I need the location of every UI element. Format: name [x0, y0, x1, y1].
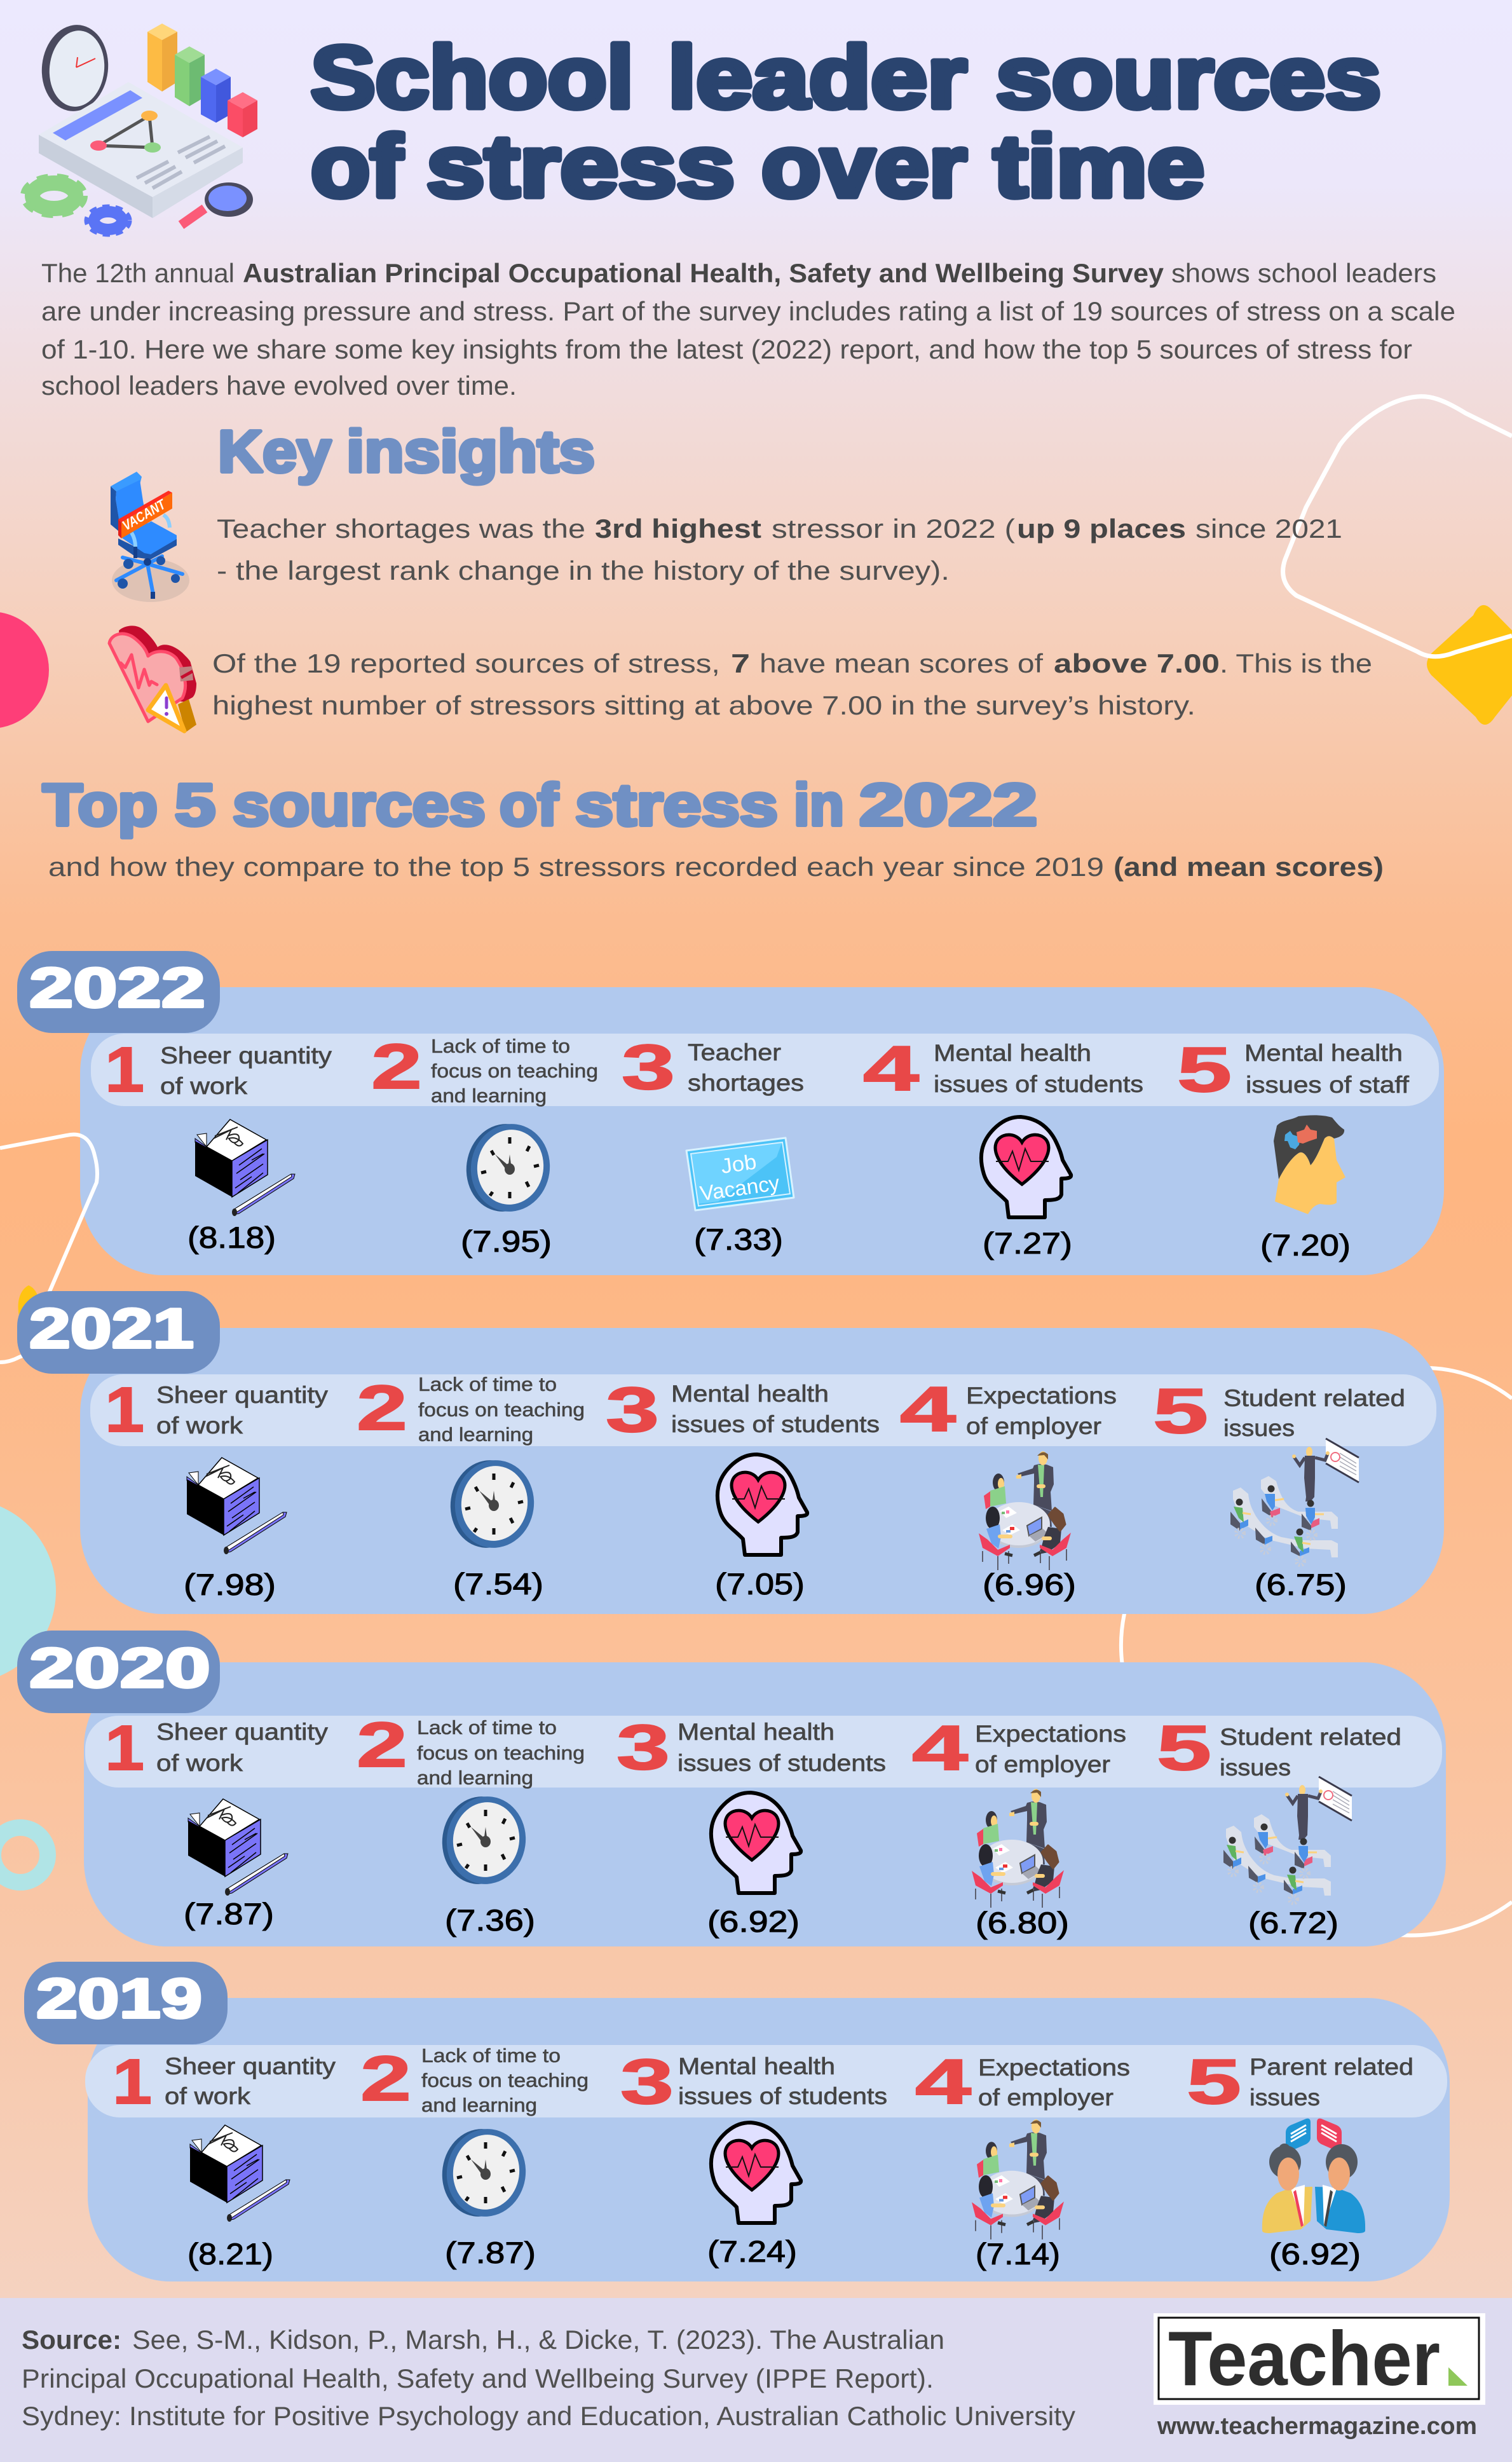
icon: head with heart: [711, 1793, 801, 1893]
heading: top 5 sources: stress: [575, 772, 778, 838]
rank 5: issues: [1220, 1754, 1291, 1781]
icon: head with heart: [981, 1117, 1071, 1217]
icon: clock: [437, 2124, 531, 2222]
rank 4: 4: [915, 2046, 972, 2117]
rank 1: 1: [105, 1713, 144, 1784]
text: insight one: [217, 514, 1342, 585]
Teacher logo: Teacher: [1168, 2315, 1440, 2402]
mean scores: (6.72): [1248, 1906, 1338, 1939]
icon: parents talking: [1262, 2119, 1365, 2233]
heading: top 5 sources: in: [794, 772, 844, 838]
icon: meeting: [972, 2119, 1064, 2240]
icon: analytics illustration: [24, 22, 257, 234]
rank 4: Expectations: [966, 1383, 1117, 1409]
rank 4: of employer: [978, 2084, 1114, 2110]
rank 4: 4: [863, 1033, 920, 1104]
text: introduction: The 12th annual: [41, 258, 235, 288]
icon: lecture: [1223, 1777, 1352, 1903]
rank 2: Lack of time to: [417, 1716, 557, 1739]
text: introduction: school leaders have evolved over time.: [41, 371, 517, 400]
decoration: white right curve: [1430, 1368, 1512, 1399]
rank 4: Mental health: [934, 1040, 1091, 1066]
title: [311, 29, 1381, 215]
mean scores: (6.92): [707, 1905, 800, 1938]
title: of: [311, 118, 403, 215]
mean scores: (8.18): [187, 1221, 276, 1254]
text: insight two: 7: [731, 648, 750, 678]
rank 2: 2: [357, 1372, 407, 1444]
rank 3: 3: [606, 1374, 659, 1446]
rank 5: issues: [1250, 2084, 1320, 2110]
heading: top 5 sources: Top: [43, 772, 158, 838]
decoration: white outline top right: [1283, 397, 1512, 657]
rank 2: [357, 1709, 585, 1789]
mean scores: (6.75): [1255, 1568, 1347, 1601]
rank 2: Lack of time to: [431, 1035, 570, 1057]
rank 3: 3: [620, 2046, 674, 2117]
decoration: pink circle: [0, 612, 49, 728]
label strip: [90, 1374, 1436, 1446]
source citation: [22, 2325, 1075, 2431]
rank 1: Sheer quantity: [156, 1719, 329, 1745]
rank 3: Mental health: [671, 1381, 829, 1407]
year badge: [17, 1631, 220, 1713]
rank 3: [616, 1712, 886, 1783]
mean scores: (6.80): [976, 1906, 1069, 1939]
source citation: Source:: [22, 2325, 121, 2355]
rank 5: [1153, 1376, 1405, 1447]
rank 2: focus on teaching: [431, 1060, 598, 1082]
panel background: [80, 987, 1444, 1275]
source citation: Sydney: Institute for Positive Psychology and Education, Australian Catholic University: [22, 2401, 1075, 2431]
text: insight one: - the largest rank change in the history of the survey).: [217, 556, 950, 585]
icon: head with puzzle: [1274, 1115, 1345, 1214]
icon: head with heart: [711, 2123, 801, 2223]
source citation: See, S-M., Kidson, P., Marsh, H., & Dicke, T. (2023). The Australian: [132, 2325, 944, 2355]
rank 3: [622, 1032, 804, 1103]
text: insight two: . This is the: [1220, 648, 1372, 678]
decoration: small yellow shape: [18, 1285, 42, 1316]
text: insight one: stressor in 2022 (: [772, 514, 1015, 544]
rank 5: Parent related: [1250, 2054, 1413, 2080]
rank 4: of employer: [975, 1751, 1110, 1777]
title: School: [311, 29, 634, 127]
rank 4: Expectations: [975, 1721, 1126, 1747]
footer background: [0, 2298, 1512, 2462]
rank 3: Mental health: [678, 2053, 835, 2079]
mean scores: [187, 1221, 1351, 1262]
rank 1: [105, 1713, 329, 1784]
text: introduction: Australian Principal Occupational Health, Safety and Wellbeing Survey: [243, 258, 1164, 288]
heading: key insights: Key: [218, 418, 331, 484]
title: sources: [996, 29, 1381, 127]
rank 2: [360, 2043, 589, 2116]
rank 1: of work: [156, 1750, 243, 1776]
rank 2: and learning: [417, 1767, 533, 1789]
icon: book: [188, 1799, 288, 1896]
text: introduction: [41, 258, 1455, 400]
decoration: teal ring: [0, 1828, 48, 1882]
mean scores: (7.14): [976, 2237, 1060, 2271]
text: insight two: highest number of stressors sitting at above 7.00 in the survey’s history.: [212, 690, 1195, 720]
panel background: [80, 1328, 1444, 1614]
rank 4: 4: [900, 1374, 957, 1445]
text: introduction: shows school leaders: [1171, 258, 1436, 288]
mean scores: (7.98): [184, 1568, 276, 1601]
label strip: [85, 1716, 1442, 1788]
text: insight two: above 7.00: [1054, 648, 1220, 678]
rank 1: Sheer quantity: [165, 2053, 336, 2079]
rank 5: 5: [1177, 1034, 1232, 1105]
text: insight two: have mean scores of: [759, 648, 1043, 678]
icon: clock: [461, 1119, 555, 1217]
icon: book: [190, 2125, 290, 2222]
mean scores: (7.87): [445, 2236, 536, 2269]
mean scores: (7.36): [445, 1903, 535, 1937]
heading: top 5 sources: 5: [175, 772, 215, 838]
icon: job vacancy sign: [686, 1138, 794, 1210]
mean scores: (8.21): [187, 2237, 273, 2271]
mean scores: (7.24): [707, 2234, 797, 2268]
mean scores: (6.96): [983, 1568, 1076, 1601]
panel: 2021: [17, 1291, 1444, 1614]
rank 2: [357, 1372, 585, 1446]
mean scores: [184, 1897, 1338, 1939]
decoration: teal circle: [0, 1499, 56, 1683]
rank 3: [606, 1374, 880, 1446]
rank 5: 5: [1187, 2046, 1241, 2117]
rank 1: [105, 1374, 329, 1446]
icon: head with heart: [718, 1454, 807, 1555]
text: insight two: Of the 19 reported sources of stress,: [212, 648, 720, 678]
label strip: [91, 1034, 1439, 1106]
footer: [0, 2298, 1512, 2462]
rank 2: and learning: [418, 1423, 533, 1446]
title: over: [761, 118, 967, 215]
rank 2: focus on teaching: [421, 2069, 589, 2091]
title: leader: [668, 29, 967, 127]
mean scores: (7.87): [184, 1897, 274, 1931]
rank 5: issues: [1223, 1415, 1295, 1441]
heading: top 5 sources: of: [500, 772, 559, 838]
panel: 2022: [17, 951, 1444, 1275]
text: insight two: [212, 648, 1372, 720]
mean scores: (7.20): [1260, 1228, 1351, 1262]
icon: job vacancy sign: Job: [719, 1149, 758, 1178]
rank 2: and learning: [431, 1084, 547, 1107]
decoration: white line left: [0, 1135, 97, 1362]
year badge: [24, 1962, 228, 2044]
rank 5: 5: [1157, 1713, 1211, 1784]
mean scores: [184, 1567, 1347, 1601]
source citation: Principal Occupational Health, Safety and Wellbeing Survey (IPPE Report).: [22, 2363, 934, 2393]
decoration: white short line: [1121, 1608, 1126, 1665]
rank 5: [1187, 2046, 1413, 2117]
rank 2: and learning: [421, 2094, 537, 2116]
mean scores: [187, 2234, 1361, 2271]
rank 2: 2: [371, 1031, 422, 1102]
year: 2021: [29, 1297, 194, 1360]
rank 5: [1177, 1034, 1410, 1105]
heading: top 5 sources: sources: [233, 772, 486, 838]
icon: clock: [445, 1455, 540, 1553]
rank 1: [105, 1034, 332, 1105]
mean scores: (7.95): [461, 1224, 552, 1258]
icon: job vacancy sign: Vacancy: [698, 1171, 781, 1205]
website: www.teachermagazine.com: [1157, 2413, 1477, 2440]
text: insight one: up 9 places: [1017, 514, 1186, 544]
rank 3: issues of students: [671, 1411, 880, 1437]
heading: key insights: insights: [346, 418, 595, 484]
year: 2020: [29, 1636, 210, 1699]
rank 4: of employer: [966, 1413, 1101, 1439]
icon: stressed heart: [109, 626, 196, 732]
rank 3: shortages: [688, 1070, 804, 1096]
mean scores: (7.27): [983, 1226, 1072, 1260]
rank 1: [112, 2046, 336, 2117]
mean scores: (6.92): [1269, 2237, 1361, 2271]
rank 4: issues of students: [934, 1071, 1143, 1097]
rank 1: Sheer quantity: [160, 1043, 332, 1069]
rank 2: 2: [357, 1709, 407, 1781]
rank 1: of work: [165, 2083, 251, 2109]
rank 2: Lack of time to: [421, 2044, 561, 2067]
text: insight one: 3rd highest: [595, 514, 761, 544]
rank 4: [863, 1033, 1143, 1104]
title: time: [993, 118, 1204, 215]
rank 5: Mental health: [1244, 1040, 1403, 1066]
rank 3: issues of students: [678, 2083, 887, 2109]
text: insight one: Teacher shortages was the: [217, 514, 585, 544]
icon: vacant chair: [111, 472, 189, 602]
rank 2: focus on teaching: [418, 1399, 585, 1421]
year: 2022: [29, 956, 205, 1019]
rank 5: Student related: [1220, 1724, 1401, 1750]
panel background: [88, 1998, 1450, 2281]
label strip: [85, 2045, 1447, 2117]
icon: meeting: [979, 1451, 1071, 1570]
rank 2: [371, 1031, 598, 1107]
year badge: [17, 1291, 220, 1374]
rank 3: Mental health: [678, 1719, 834, 1745]
icon: meeting: [972, 1789, 1064, 1908]
rank 4: [900, 1374, 1117, 1445]
rank 1: of work: [156, 1412, 243, 1439]
panel background: [84, 1662, 1446, 1946]
year badge: [17, 951, 220, 1033]
rank 4: Expectations: [978, 2055, 1130, 2081]
rank 1: Sheer quantity: [156, 1382, 329, 1408]
rank 1: 1: [105, 1034, 144, 1105]
rank 4: 4: [912, 1713, 969, 1784]
rank 1: of work: [160, 1073, 248, 1099]
mean scores: (7.33): [694, 1222, 783, 1256]
decoration: white bottom curve: [1398, 1902, 1512, 1936]
decoration: yellow shape: [1427, 605, 1512, 725]
rank 5: Student related: [1223, 1385, 1405, 1411]
text: insight one: since 2021: [1195, 514, 1342, 544]
rank 5: issues of staff: [1246, 1072, 1410, 1098]
rank 3: issues of students: [678, 1750, 886, 1776]
year: 2019: [36, 1967, 202, 2030]
heading: top 5 sources: 2022: [859, 772, 1037, 838]
rank 2: Lack of time to: [418, 1373, 557, 1395]
mean scores: (7.05): [715, 1567, 805, 1601]
rank 1: 1: [105, 1374, 144, 1446]
icon: book: [187, 1458, 287, 1554]
icon: book: [195, 1119, 295, 1216]
rank 3: [620, 2046, 887, 2117]
rank 4: [915, 2046, 1130, 2117]
icon: clock: [437, 1791, 531, 1889]
panel: 2019: [24, 1962, 1450, 2281]
rank 5: [1157, 1713, 1401, 1784]
rank 1: 1: [112, 2046, 152, 2117]
rank 3: 3: [622, 1032, 675, 1103]
rank 2: focus on teaching: [417, 1742, 585, 1764]
rank 3: Teacher: [688, 1039, 781, 1065]
rank 2: 2: [360, 2043, 411, 2114]
text: subheading: and how they compare to the top 5 stressors recorded each year since 2019: [48, 852, 1104, 882]
icon: lecture: [1230, 1439, 1359, 1565]
text: subheading: (and mean scores): [1114, 852, 1384, 882]
rank 5: 5: [1153, 1376, 1208, 1447]
title: stress: [426, 118, 735, 215]
text: introduction: of 1-10. Here we share some key insights from the latest (2022) report, and how the top 5 sources of stress for: [41, 334, 1412, 364]
icon: vacant chair: VACANT: [119, 496, 169, 533]
text: introduction: are under increasing pressure and stress. Part of the survey includes rating a list of 19 sources of stress on a scale: [41, 296, 1455, 326]
mean scores: (7.54): [453, 1567, 543, 1601]
rank 4: [912, 1713, 1126, 1784]
rank 3: 3: [616, 1712, 670, 1783]
panel: 2020: [17, 1631, 1446, 1946]
